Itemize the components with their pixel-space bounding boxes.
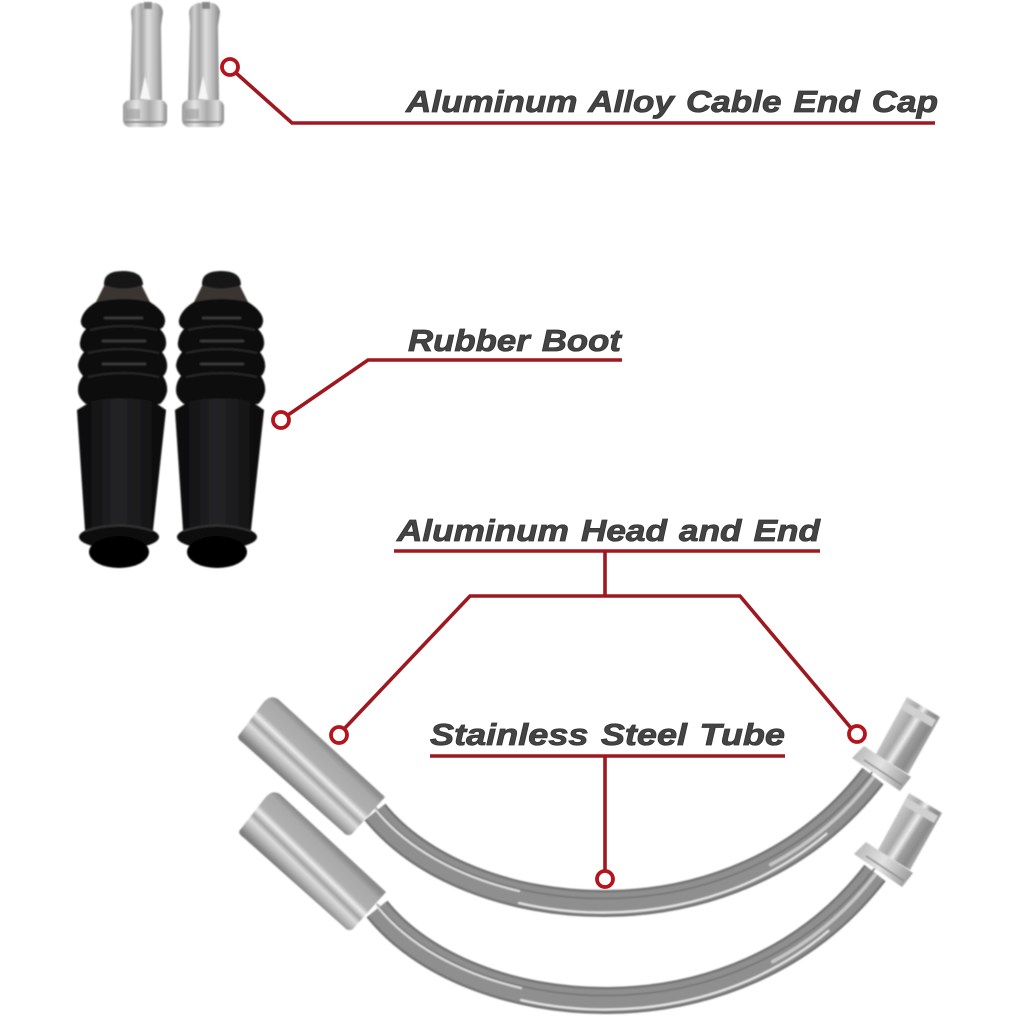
callout: stainless steel tube	[430, 717, 785, 887]
marker	[273, 412, 289, 428]
upper V-brake noodle	[238, 697, 940, 913]
leader line	[236, 73, 935, 123]
callout: aluminum head and end	[331, 513, 865, 743]
aluminum end	[854, 793, 942, 887]
marker	[597, 871, 613, 887]
aluminum end	[852, 697, 940, 791]
right marker	[849, 726, 865, 742]
steel tube	[375, 771, 873, 913]
aluminum head	[238, 697, 385, 835]
lower V-brake noodle	[239, 792, 942, 1010]
callout: rubber boot	[273, 323, 623, 428]
marker	[222, 59, 238, 75]
leader line	[430, 756, 785, 871]
callout: aluminum alloy cable end cap	[222, 59, 938, 123]
steel tube	[377, 868, 875, 1010]
rubber boots	[77, 271, 265, 568]
cable end caps	[123, 2, 224, 127]
left marker	[331, 727, 347, 743]
leader lines	[344, 551, 851, 729]
label: Stainless Steel Tube	[430, 717, 785, 752]
label: Rubber Boot	[408, 323, 623, 358]
label: Aluminum Head and End	[396, 513, 821, 548]
icon: right end cap	[182, 2, 224, 127]
label: Aluminum Alloy Cable End Cap	[405, 84, 938, 119]
icon: left end cap	[123, 2, 167, 127]
icon: right rubber boot	[175, 271, 265, 568]
leader line	[288, 360, 622, 415]
aluminum head	[239, 792, 386, 930]
icon: left rubber boot	[77, 271, 167, 568]
